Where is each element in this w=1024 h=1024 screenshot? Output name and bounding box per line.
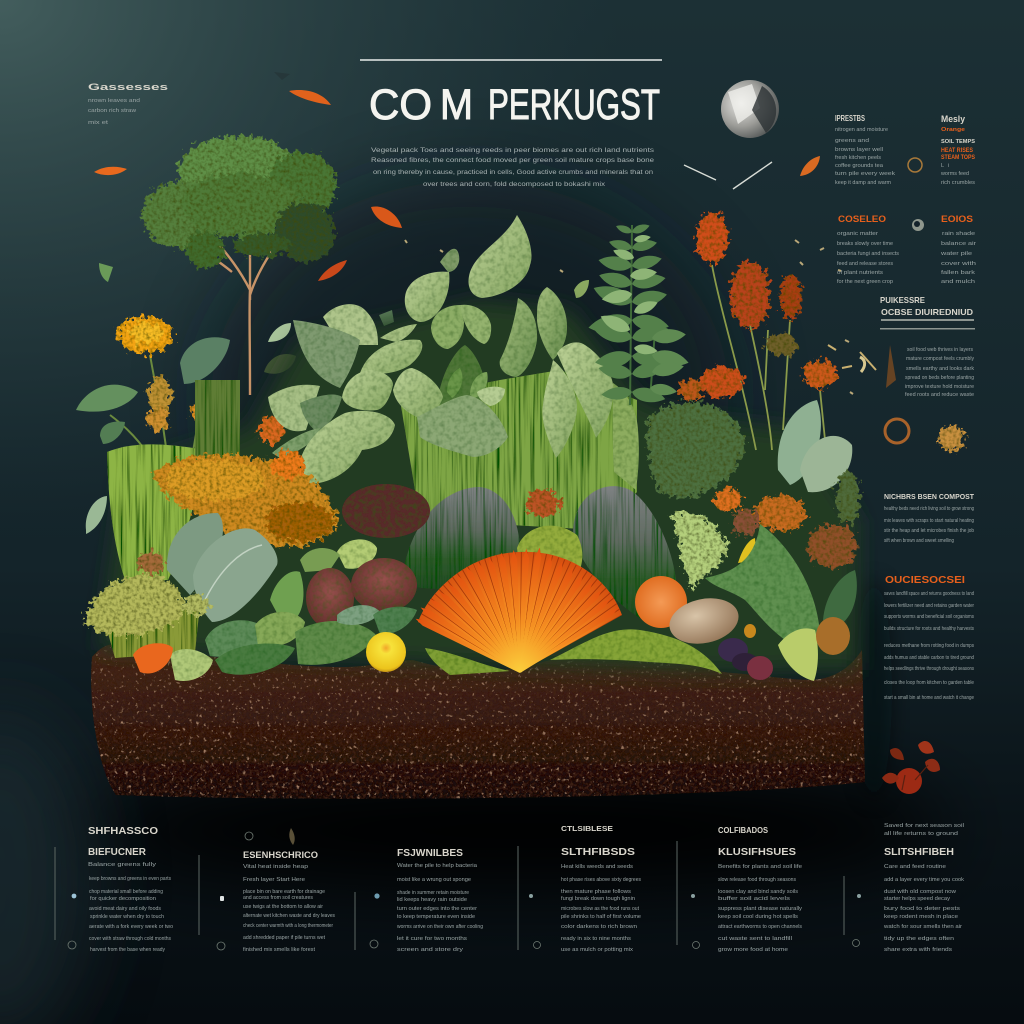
right text: white heading block: smells earthy and looks dark: [906, 366, 974, 372]
bottom column 4: pile shrinks to half of first volume: [561, 914, 641, 920]
bottom column 3: [396, 848, 483, 953]
bottom column 1: for quicker decomposition: [90, 896, 156, 902]
right text: white heading block: PUIKESSRE: [880, 295, 925, 305]
bottom column 1: SHFHASSCO: [88, 826, 158, 837]
fan body: [418, 552, 622, 672]
icon: grey disc: [912, 219, 924, 231]
bottom column 2: alternate wet kitchen waste and dry leaves: [243, 913, 335, 919]
stems: [712, 265, 826, 450]
bottom column 6: Care and feed routine: [884, 864, 946, 870]
brown fruit: [816, 617, 850, 655]
right text: short orange block: and mulch: [941, 279, 975, 285]
bottom column 1: harvest from the base when ready: [90, 947, 165, 953]
right text: white heading block: OCBSE DIUIREDNIUD: [881, 307, 973, 317]
right text: red block: adds humus and stable carbon to tired ground: [884, 655, 974, 661]
bottom column 5: KLUSIFHSUES: [718, 847, 796, 858]
bottom column 3: lid keeps heavy rain outside: [397, 897, 467, 903]
bottom column 3: Water the pile to help bacteria: [397, 863, 478, 869]
top right text: block B: Li: [941, 163, 949, 169]
right text: white heading block: feed roots and reduce waste: [905, 392, 974, 398]
soil block: [91, 644, 865, 799]
intro text: [371, 147, 655, 188]
bottom column 2: finished mix smells like forest: [243, 947, 315, 953]
right text: white heading block: mature compost feels crumbly: [906, 356, 974, 362]
top right text: block B: Mesly: [941, 114, 965, 124]
orange shrub: [152, 451, 338, 547]
right text: short orange block: rain shade: [942, 231, 975, 237]
right text: red block: saves landfill space and returns goodness to land: [884, 591, 974, 597]
light fern: [672, 512, 728, 592]
bottom column 6: SLITSHFIBEH: [884, 847, 954, 858]
right text: red block: lowers fertilizer need and retains garden water: [884, 603, 974, 609]
orange fan plant: [416, 548, 622, 673]
fern: [587, 222, 690, 406]
fan blades: [414, 547, 620, 675]
stone: [665, 592, 743, 650]
right text: lower block: [884, 492, 974, 544]
tree: [142, 136, 336, 395]
bottom column 1: avoid meat dairy and oily foods: [89, 906, 161, 912]
top right text: block A: fresh kitchen peels: [835, 155, 881, 161]
bottom column 4: Heat kills weeds and seeds: [561, 864, 633, 870]
bottom column 5: COLFIBADOS: [718, 826, 769, 835]
icon: yellow fruit: [366, 632, 406, 672]
bottom column 2: check center warmth with a long thermometer: [243, 923, 333, 929]
bottom column 1: keep browns and greens in even parts: [89, 876, 171, 882]
bottom column 2: Vital heat inside heap: [243, 864, 308, 870]
dark leaves: [180, 337, 230, 384]
bottom column 1: cover with straw through cold months: [89, 936, 171, 942]
top right text: block B: HEAT RISES: [941, 148, 973, 154]
right text: orange block: feed and release stores: [837, 261, 893, 267]
top left text block: [88, 82, 168, 126]
top right text: block B: worms feed: [940, 171, 969, 177]
bottom column 4: then mature phase follows: [561, 889, 631, 895]
title: [369, 81, 660, 129]
yellow petal: [738, 538, 757, 563]
small dry flower: [137, 552, 163, 574]
top right text: block B: STEAM TOPS: [941, 155, 975, 161]
top left text block: Gassesses: [88, 82, 168, 92]
central grass: [400, 370, 637, 530]
bottom column 6: all life returns to ground: [884, 831, 958, 837]
icon: dried flower: [939, 425, 965, 451]
back left leaves: [323, 304, 378, 345]
orange blooms: [714, 472, 860, 568]
right text: white heading block: [880, 295, 975, 398]
purple fruits: [718, 638, 748, 662]
light frill leaves: [337, 539, 377, 569]
top left text block: carbon rich straw: [88, 108, 137, 114]
right text: orange block: organic matter: [837, 231, 878, 237]
bottom column 6: dust with old compost now: [884, 889, 957, 895]
bottom column 4: use as mulch or potting mix: [561, 947, 633, 953]
bottom column 4: fungi break down tough lignin: [561, 896, 635, 902]
bottom column 5: cut waste sent to landfill: [718, 936, 792, 942]
title: PERKUGST: [488, 81, 660, 129]
bottom column 3: let it cure for two months: [397, 936, 467, 942]
bottom column 6: [883, 823, 964, 953]
right text: orange block: of plant nutrients: [837, 270, 883, 276]
bottom column 3: FSJWNILBES: [397, 848, 463, 859]
bottom column 6: share extra with friends: [884, 947, 952, 953]
mid leaves: [170, 605, 417, 681]
icon: grey sphere: [721, 80, 779, 138]
red and orange plants right: [647, 212, 852, 497]
bottom column 3: screen and store dry: [397, 947, 463, 953]
top left text block: nrown leaves and: [88, 98, 140, 104]
moss mound: [517, 526, 582, 585]
bottom column 1: aerate with a fork every week or two: [89, 924, 173, 930]
top right text: block A: [835, 114, 895, 186]
dark fern shrub: [647, 402, 745, 497]
upper leaves: [468, 215, 531, 298]
bottom column 2: [243, 850, 335, 953]
bottom column 3: moist like a wrung out sponge: [397, 877, 471, 883]
stems: [110, 355, 230, 480]
blossoms: [677, 212, 837, 401]
title block: [360, 60, 662, 188]
title: M: [440, 81, 473, 129]
bottom column 4: color darkens to rich brown: [561, 924, 637, 930]
right text: lower block: sift when brown and sweet smelling: [884, 538, 954, 544]
right text: red block: OUCIESOCSEI: [885, 575, 965, 586]
bottom column 6: tidy up the edges often: [884, 936, 954, 942]
small central dark leaves: [437, 345, 486, 405]
bottom column 5: attract earthworms to open channels: [718, 924, 802, 930]
right text: orange block: bacteria fungi and insects: [837, 251, 899, 257]
title: CO: [369, 81, 432, 129]
bottom column 1: Balance greens fully: [88, 862, 156, 868]
large green leaf: [705, 524, 820, 640]
right text: orange block: [837, 214, 899, 285]
right text: short orange block: fallen bark: [941, 270, 975, 276]
red flower: [528, 489, 561, 517]
right text: white heading block: spread on beds before planting: [905, 375, 974, 381]
right text: red block: [884, 575, 974, 701]
bottom column 3: to keep temperature even inside: [397, 914, 475, 920]
canopy: [142, 136, 336, 268]
right text: short orange block: water pile: [940, 251, 972, 257]
left grass: [107, 444, 205, 580]
bottom column 4: SLTHFIBSDS: [561, 847, 635, 858]
bottom column 1: sprinkle water when dry to touch: [90, 914, 164, 920]
left flowers and foliage: [76, 316, 285, 580]
right text: white heading block: soil food web thrives in layers: [907, 347, 973, 353]
bottom column 5: grow more food at home: [718, 947, 788, 953]
grey green leaves: [778, 400, 821, 485]
top right text: block A: browns layer well: [835, 147, 883, 153]
left big leaves: [167, 513, 223, 595]
bottom column 6: starter helps speed decay: [884, 896, 950, 902]
right text: short orange block: [940, 214, 976, 285]
bottom column 5: keep soil cool during hot spells: [718, 914, 798, 920]
bottom column 1: BIEFUCNER: [88, 847, 147, 858]
bottom column 3: shade in summer retain moisture: [397, 890, 469, 896]
icon: ring: [908, 158, 922, 172]
top right text: block A: keep it damp and warm: [835, 180, 891, 186]
bottom column 1: [88, 826, 173, 953]
moss: [100, 605, 200, 658]
right text: lower block: healthy beds need rich living soil to grow strong: [884, 506, 974, 512]
dark right leaf: [823, 570, 857, 625]
bottom column 4: CTLSIBLESE: [561, 826, 613, 833]
intro text: Vegetal pack Toes and seeing reeds in peer biomes are out rich land nutrients: [371, 147, 655, 154]
rust round vegetable: [342, 484, 430, 538]
trunk: [205, 222, 292, 395]
right text: red block: builds structure for roots and healthy harvests: [884, 626, 974, 632]
bottom column 1: chop material small before adding: [89, 889, 163, 895]
right text: orange block: breaks slowly over time: [837, 241, 893, 247]
bottom column 6: watch for sour smells then air: [883, 924, 962, 930]
bottom column 5: slow release food through seasons: [718, 877, 796, 883]
right text: lower block: mix leaves with scraps to start natural heating: [884, 518, 974, 524]
top right text: block A: nitrogen and moisture: [835, 127, 888, 133]
bottom column 4: [561, 826, 641, 953]
top right text: block A: coffee grounds tea: [835, 163, 884, 169]
bottom column 6: keep rodent mesh in place: [884, 914, 958, 920]
bottom column 2: and access from soil creatures: [243, 895, 313, 901]
bottom column 6: bury food to deter pests: [884, 906, 960, 912]
top right text: block B: [940, 114, 975, 186]
bottom column 2: add shredded paper if pile turns wet: [243, 935, 325, 941]
top right text: block A: turn pile every week: [835, 171, 895, 177]
right foreground vegetables: [635, 472, 860, 681]
icon: yellow flower: [117, 316, 173, 354]
icon: red flower cluster: [882, 741, 940, 794]
bottom column 2: use twigs at the bottom to allow air: [243, 904, 323, 910]
small bottom icons: [68, 828, 861, 950]
orange blossoms: [147, 377, 285, 444]
top right text: block B: SOIL TEMPS: [941, 139, 975, 145]
peach flower: [133, 643, 173, 673]
right text: red block: start a small bin at home and watch it change: [884, 695, 974, 701]
right text: red block: reduces methane from rotting food in dumps: [884, 643, 974, 649]
right text: red block: closes the loop from kitchen to garden table: [884, 680, 974, 686]
bottom column 4: microbes slow as the food runs out: [561, 906, 639, 912]
bottom column 4: ready in six to nine months: [561, 936, 631, 942]
foliage backing mass: [100, 300, 858, 672]
bottom column 5: Benefits for plants and soil life: [718, 864, 802, 870]
big green central leaves: [268, 215, 639, 490]
right text: short orange block: EOIOS: [941, 214, 973, 224]
right text: white heading block: improve texture hold moisture: [905, 384, 974, 390]
intro text: over trees and corn, fold decomposed to bokashi mix: [423, 181, 606, 188]
bottom column 5: loosen clay and bind sandy soils: [718, 889, 798, 895]
dome grass: [402, 487, 520, 589]
bottom column 3: turn outer edges into the center: [397, 906, 477, 912]
orange citrus: [635, 576, 687, 628]
center leaf: [270, 571, 303, 618]
bottom column 5: buffer soil acid levels: [718, 896, 790, 902]
fan dark ribs: [458, 610, 582, 734]
clumps: [380, 324, 417, 342]
top right text: block B: rich crumbles: [941, 180, 975, 186]
drifting leaves and debris: [94, 72, 896, 394]
right text: orange block: for the next green crop: [837, 279, 893, 285]
icon: orange ring: [885, 419, 909, 443]
right text: short orange block: balance air: [941, 241, 976, 247]
right text: short orange block: cover with: [941, 261, 976, 267]
right text: lower block: stir the heap and let microbes finish the job: [884, 528, 974, 534]
bottom column 6: Saved for next season soil: [884, 823, 964, 829]
top right text: block A: IPRESTBS: [835, 114, 865, 123]
bottom column 5: [718, 826, 802, 953]
bottom column 3: worms arrive on their own after cooling: [396, 924, 483, 930]
pale leaf: [778, 628, 818, 681]
bottom column 2: ESENHSCHRICO: [243, 850, 318, 861]
bottom panel dividers: [55, 841, 844, 950]
top right text: block B: Orange: [941, 127, 965, 133]
bottom column 6: add a layer every time you cook: [884, 877, 964, 883]
bottom column 4: hot phase rises above sixty degrees: [561, 877, 641, 883]
right text: red block: helps seedlings thrive through drought seasons: [884, 666, 974, 672]
bottom column 2: Fresh layer Start Here: [243, 877, 305, 883]
bottom column 5: suppress plant disease naturally: [718, 906, 802, 912]
top right text: block A: greens and: [835, 138, 869, 144]
intro text: Reasoned fibres, the connect food moved per green soil mature crops base bone: [371, 157, 654, 164]
moss strips: [425, 629, 722, 675]
top left text block: mix et: [88, 120, 109, 126]
root vegetables: [306, 568, 354, 628]
bottom column 2: place bin on bare earth for drainage: [243, 889, 325, 895]
intro text: on ring thereby in cause, practiced in cells, Good active crumbs and minerals that on: [373, 169, 653, 176]
domed grasses and root vegetables: [85, 451, 677, 681]
right text: red block: supports worms and beneficial soil organisms: [884, 614, 974, 620]
right text: orange block: COSELEO: [838, 214, 886, 224]
right text: lower block: NICHBRS BSEN COMPOST: [884, 492, 974, 501]
